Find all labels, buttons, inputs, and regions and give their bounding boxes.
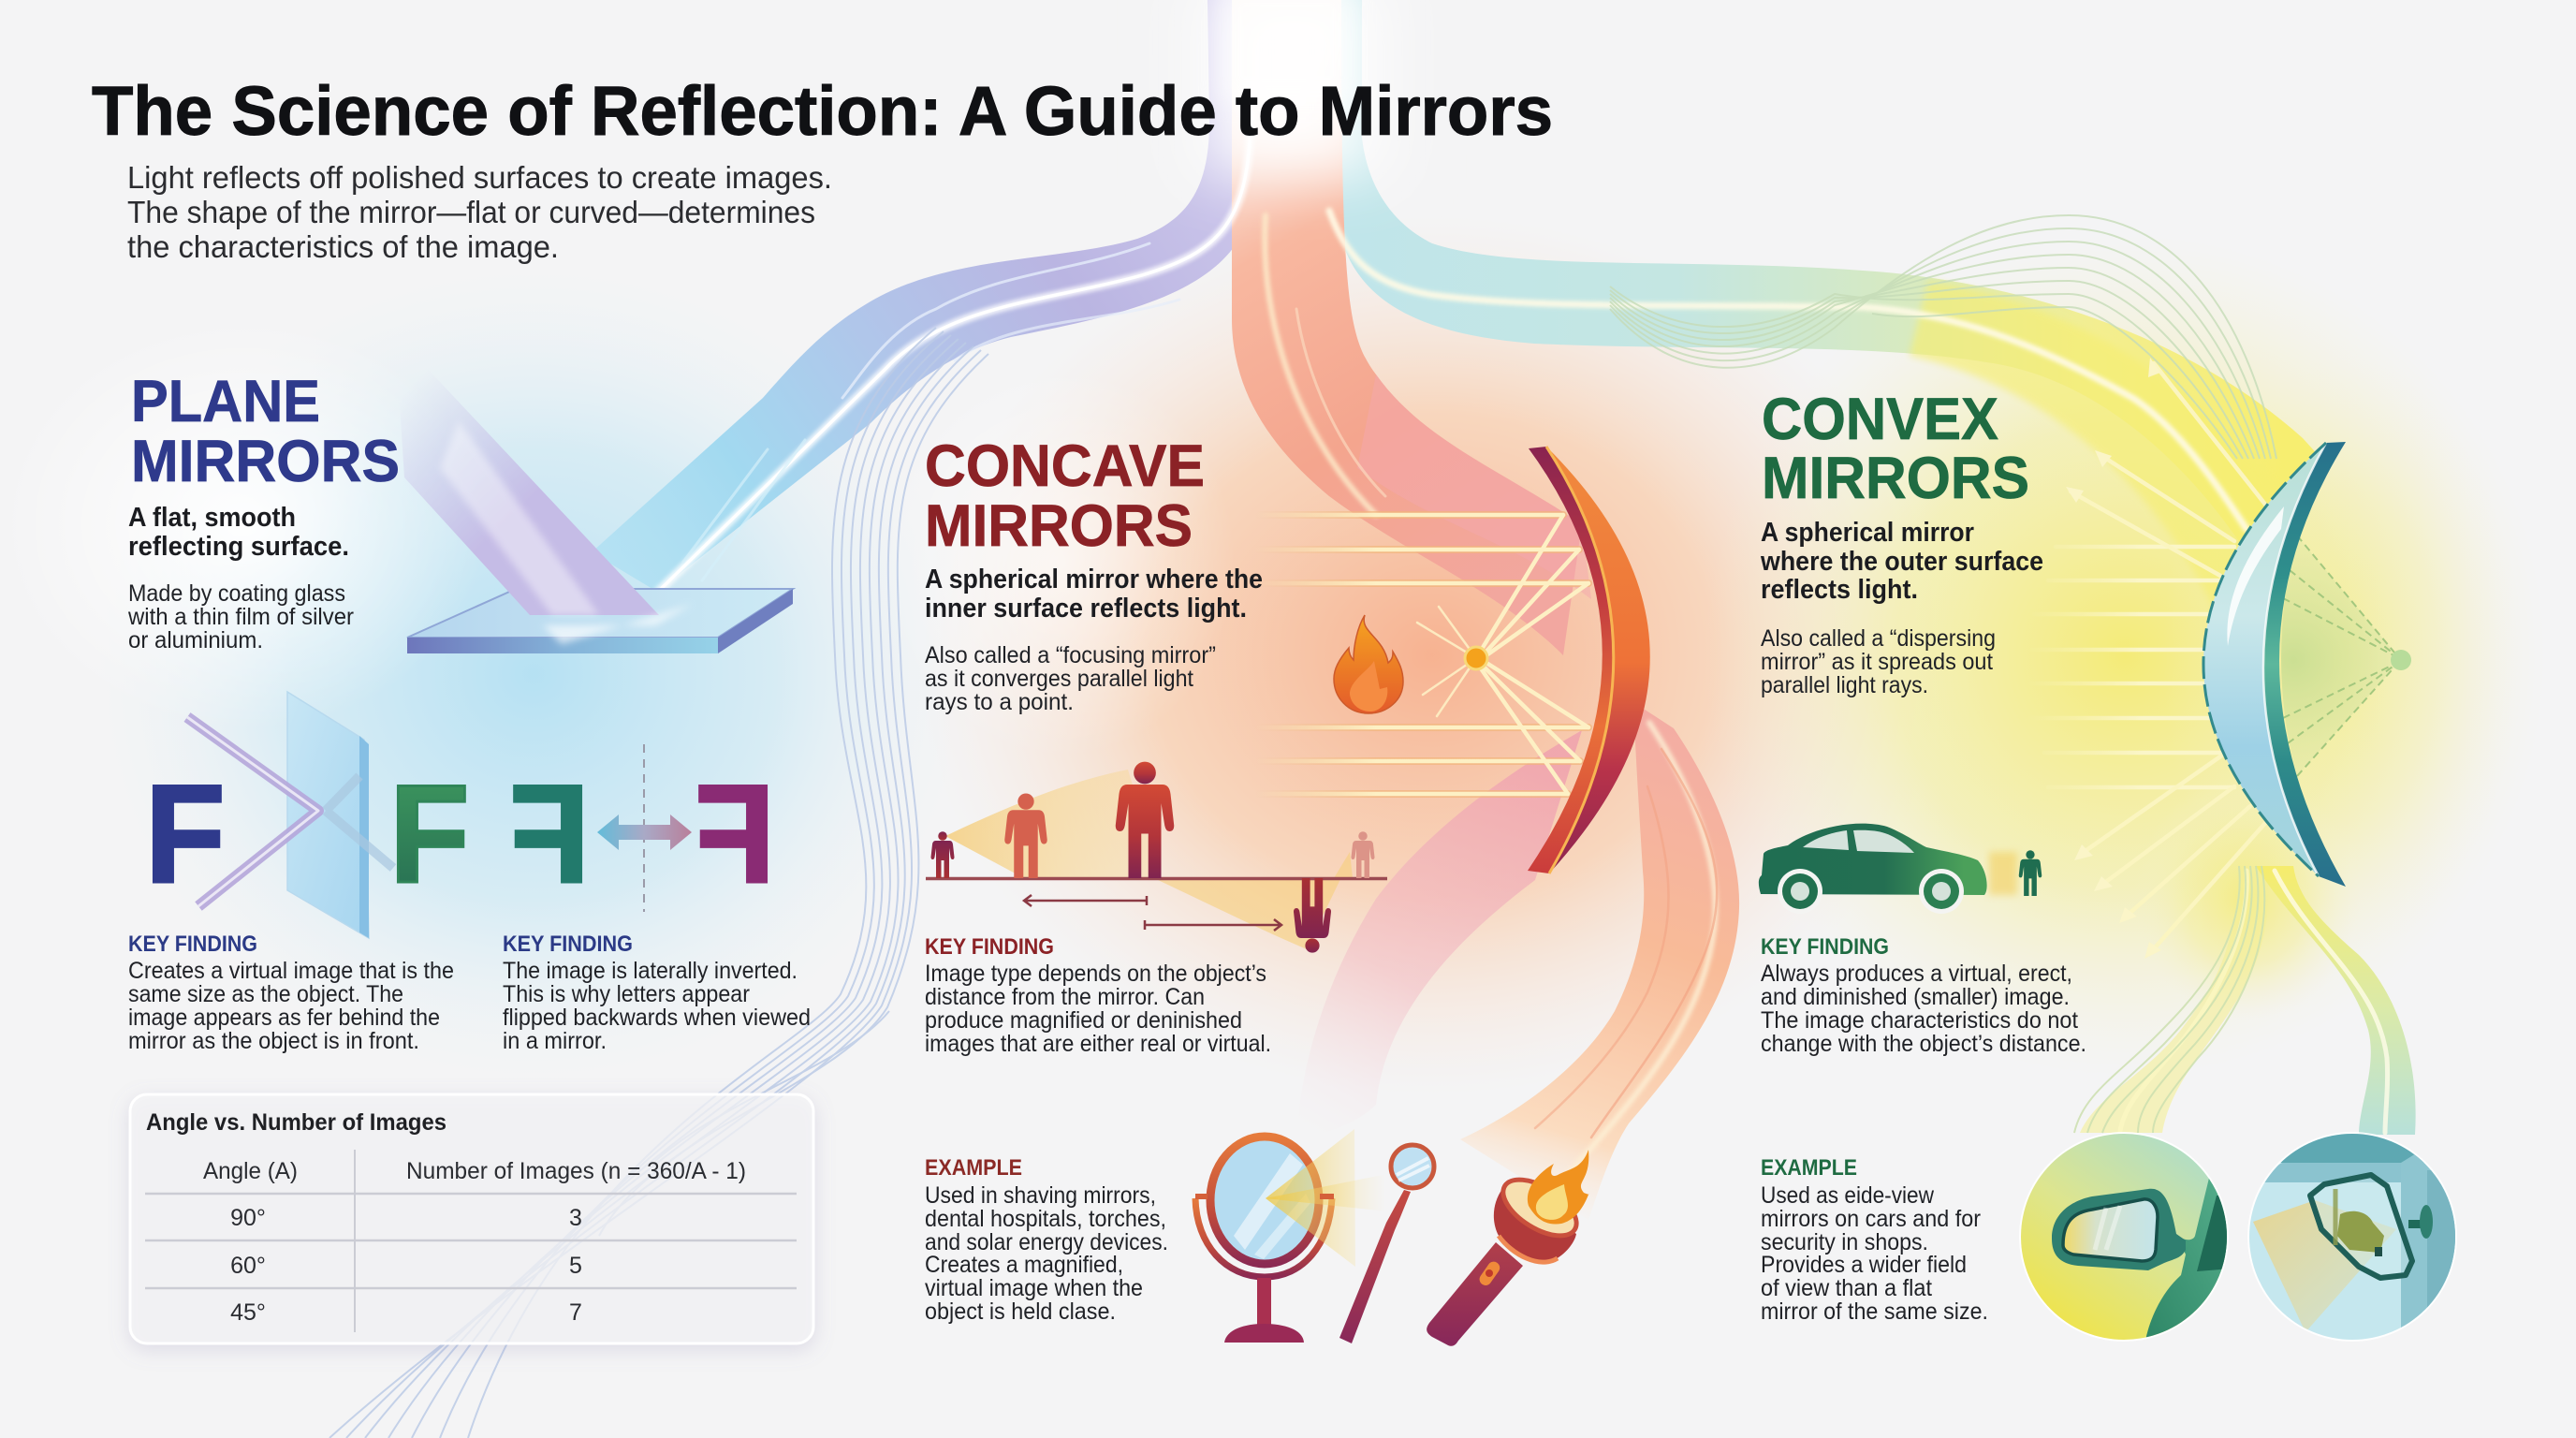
convex mirror definition [1760, 518, 2043, 605]
example: convex uses [1761, 1155, 1988, 1325]
icon: shop security mirror [2247, 1128, 2462, 1343]
concave mirror definition: A spherical mirror where the [925, 565, 1263, 594]
table: angle vs number of images [130, 1094, 813, 1343]
concave mirror description: rays to a point. [925, 689, 1074, 715]
table: angle vs number of images: 5 [569, 1253, 582, 1279]
colour glows behind the three mirror sections [0, 215, 2546, 1095]
table: angle vs number of images: Angle (A) [203, 1158, 298, 1184]
diagram: F and its image in a mirror: F [509, 756, 590, 912]
key finding: virtual image: image appears as fer behind the [128, 1005, 440, 1031]
table: angle vs number of images: 3 [569, 1205, 582, 1231]
icon: dental mirror [1339, 1145, 1434, 1343]
plane mirror definition [128, 503, 349, 562]
thin line bundles [329, 215, 2276, 1438]
heading: concave mirrors: CONCAVE [925, 433, 1205, 499]
heading: concave mirrors: MIRRORS [925, 493, 1193, 559]
intro text: Light reflects off polished surfaces to create images. [127, 160, 832, 195]
table: angle vs number of images: 60° [230, 1253, 266, 1279]
example: concave uses: object is held clase. [925, 1299, 1116, 1325]
key finding: virtual image [128, 932, 454, 1054]
convex mirror definition: A spherical mirror [1761, 518, 1974, 548]
example: concave uses: and solar energy devices. [925, 1229, 1168, 1255]
panel: concave mirrors [925, 433, 1650, 1346]
plane mirror description [127, 580, 354, 653]
title: The Science of Reflection: A Guide to Mirrors [92, 72, 1553, 150]
intro text [127, 160, 832, 264]
icon: car and diminished person [1759, 824, 2042, 914]
heading: convex mirrors [1762, 387, 2029, 511]
example: concave uses: Used in shaving mirrors, [925, 1182, 1156, 1209]
key finding: virtual image: KEY FINDING [128, 932, 257, 957]
icon: shaving mirror on stand [1195, 1129, 1387, 1343]
key finding: image type: images that are either real or virtual. [925, 1031, 1271, 1057]
example: concave uses: EXAMPLE [925, 1155, 1022, 1181]
concave mirror description: Also called a “focusing mirror” [925, 642, 1216, 668]
plane mirror definition: reflecting surface. [128, 532, 349, 562]
key finding: lateral inversion: in a mirror. [503, 1028, 607, 1054]
key finding: virtual image: same size as the object. The [128, 981, 403, 1007]
intro text: the characteristics of the image. [127, 229, 559, 264]
key finding: image type: Image type depends on the object’s [925, 961, 1266, 987]
key finding: lateral inversion: flipped backwards when viewed [503, 1005, 811, 1031]
heading: convex mirrors: MIRRORS [1762, 446, 2029, 511]
concave mirror description [925, 642, 1216, 715]
example: convex uses: Provides a wider field [1761, 1252, 1967, 1278]
icon: flame at focus [1334, 615, 1403, 713]
table: angle vs number of images: 90° [230, 1205, 266, 1231]
plane mirror description: with a thin film of silver [127, 604, 354, 630]
heading: concave mirrors [925, 433, 1205, 559]
diagram: image size vs object distance [926, 762, 1387, 953]
plane mirror definition: A flat, smooth [128, 503, 296, 533]
diagram: F and its image in a mirror [145, 692, 775, 938]
convex mirror description: parallel light rays. [1761, 672, 1928, 698]
diagram: convex mirror dispersing rays [2025, 358, 2411, 959]
table: angle vs number of images: 45° [230, 1299, 266, 1326]
light bands flowing from the top source [592, 0, 2416, 1220]
example: convex uses: Used as eide-view [1761, 1182, 1935, 1209]
table: angle vs number of images: Angle vs. Number of Images [146, 1109, 446, 1136]
key finding: virtual image: Creates a virtual image that is the [128, 958, 454, 984]
convex mirror definition: reflects light. [1761, 575, 1918, 605]
heading: plane mirrors: PLANE [131, 369, 320, 434]
key finding: image type: produce magnified or deninished [925, 1007, 1242, 1034]
intro text: The shape of the mirror—flat or curved—determines [127, 195, 815, 229]
heading: convex mirrors: CONVEX [1762, 387, 1998, 452]
icon: flashlight with flame [1427, 1150, 1589, 1346]
key finding: lateral inversion: KEY FINDING [503, 932, 633, 957]
concave mirror definition [925, 565, 1263, 624]
key finding: convex image: KEY FINDING [1761, 934, 1889, 960]
example: convex uses: EXAMPLE [1761, 1155, 1857, 1181]
key finding: virtual image: mirror as the object is in front. [128, 1028, 419, 1054]
example: concave uses [925, 1155, 1168, 1325]
key finding: convex image [1761, 934, 2086, 1057]
key finding: lateral inversion: This is why letters appear [503, 981, 750, 1007]
diagram: F and its image in a mirror: F [695, 756, 775, 912]
plane mirror description: or aluminium. [128, 627, 263, 653]
convex mirror description: mirror” as it spreads out [1761, 649, 1993, 675]
icon: car side-view mirror [2017, 1128, 2232, 1343]
key finding: convex image: and diminished (smaller) image. [1761, 984, 2070, 1010]
key finding: lateral inversion [503, 932, 811, 1054]
convex mirror definition: where the outer surface [1760, 547, 2043, 577]
key finding: convex image: Always produces a virtual, erect, [1761, 961, 2072, 987]
key finding: image type [925, 934, 1271, 1057]
example: convex uses: mirrors on cars and for [1761, 1206, 1981, 1232]
example: convex uses: of view than a flat [1761, 1275, 1932, 1301]
key finding: convex image: The image characteristics do not [1761, 1007, 2078, 1034]
convex mirror description: Also called a “dispersing [1761, 625, 1996, 652]
convex mirror description [1761, 625, 1996, 698]
example: convex uses: security in shops. [1761, 1229, 1928, 1255]
diagram: F and its image in a mirror: F [389, 756, 470, 912]
table: angle vs number of images: 7 [569, 1299, 582, 1326]
illustration: light beam on flat mirror [398, 367, 793, 653]
panel: plane mirrors [127, 367, 813, 1343]
key finding: image type: KEY FINDING [925, 934, 1054, 960]
key finding: image type: distance from the mirror. Can [925, 984, 1205, 1010]
panel: convex mirrors [1759, 358, 2462, 1343]
heading: plane mirrors: MIRRORS [131, 429, 400, 494]
example: concave uses: virtual image when the [925, 1275, 1143, 1301]
key finding: convex image: change with the object’s distance. [1761, 1031, 2086, 1057]
example: concave uses: Creates a magnified, [925, 1252, 1123, 1278]
example: convex uses: mirror of the same size. [1761, 1299, 1988, 1325]
key finding: lateral inversion: The image is laterally inverted. [503, 958, 798, 984]
example: concave uses: dental hospitals, torches, [925, 1206, 1166, 1232]
diagram: F and its image in a mirror: F [145, 756, 226, 912]
table: angle vs number of images: Number of Images (n = 360/A - 1) [406, 1158, 746, 1184]
concave mirror description: as it converges parallel light [925, 666, 1193, 692]
concave mirror definition: inner surface reflects light. [925, 594, 1247, 624]
diagram: concave mirror focusing rays [1254, 447, 1650, 873]
plane mirror description: Made by coating glass [128, 580, 345, 607]
heading: plane mirrors [131, 369, 400, 494]
